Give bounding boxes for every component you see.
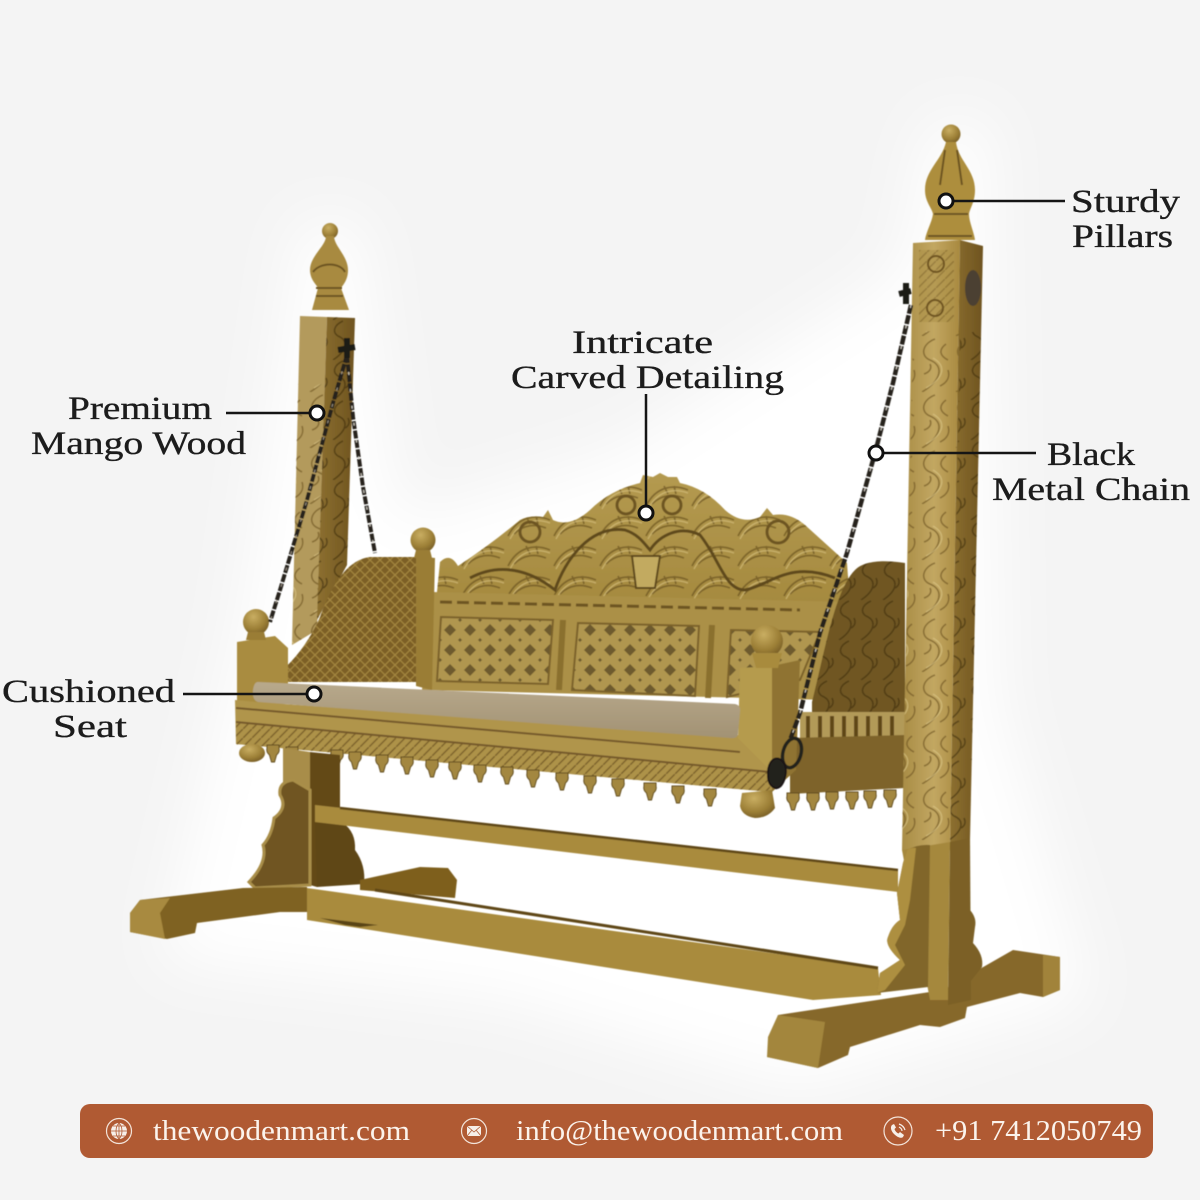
- back panel with lattice: [422, 592, 850, 700]
- chain lock: [768, 736, 805, 788]
- left pillar finial: [310, 223, 349, 310]
- right chain: [790, 305, 911, 740]
- lower rail: [307, 888, 881, 1000]
- callout: Intricate Carved Detailing: [511, 325, 784, 520]
- right front post: [738, 666, 772, 772]
- chains: [270, 283, 911, 788]
- back foot: [360, 867, 457, 898]
- left right bracket: [315, 823, 364, 887]
- right base: [767, 950, 1060, 1068]
- balusters: [800, 712, 905, 740]
- right rear bracket: [970, 910, 982, 982]
- email text: info@thewoodenmart.com: [516, 1115, 843, 1147]
- left seat side panel: [277, 557, 420, 682]
- left back post: [416, 556, 435, 690]
- ball finials: [243, 609, 269, 635]
- callout: Sturdy Pillars: Pillars: [1072, 219, 1173, 255]
- front foot beam: [130, 887, 307, 939]
- left bracket: [249, 780, 310, 888]
- callout: Cushioned Seat: Seat: [53, 709, 127, 745]
- right pillar finial: [925, 124, 975, 240]
- lattice panel right: [727, 630, 820, 697]
- website text: thewoodenmart.com: [153, 1115, 410, 1147]
- right pillar lower section: [902, 842, 950, 1000]
- right pillar side face: [950, 240, 983, 850]
- left base: [130, 867, 881, 1000]
- left rear post: [237, 636, 288, 745]
- contact bar: [80, 1104, 1153, 1158]
- right pillar: [877, 124, 983, 1005]
- left chain back: [347, 355, 375, 553]
- pillar bolt: [965, 270, 981, 306]
- callout: Black Metal Chain: [869, 437, 1190, 508]
- callout: Premium Mango Wood: Mango Wood: [31, 426, 247, 462]
- left chain front: [270, 355, 347, 622]
- icon: phone: [884, 1117, 912, 1145]
- icon: envelope: [462, 1118, 486, 1144]
- callout: Intricate Carved Detailing: Carved Detailing: [511, 360, 784, 396]
- callout: Sturdy Pillars: Sturdy: [1071, 184, 1181, 220]
- right seat side panel: [790, 561, 905, 794]
- callout: Intricate Carved Detailing: Intricate: [572, 325, 713, 361]
- left pillar side face: [317, 317, 355, 620]
- left pillar front face: [292, 316, 327, 645]
- right chain hook: [899, 283, 911, 304]
- callout: Sturdy Pillars: [939, 184, 1181, 255]
- background white glow: [160, 120, 1090, 1090]
- left chain hook: [338, 338, 355, 358]
- right front bracket: [877, 845, 930, 993]
- seat rail: [235, 700, 772, 792]
- callout: Black Metal Chain: Black: [1047, 437, 1136, 473]
- left lower post: [283, 748, 310, 885]
- left leg stand: [249, 748, 364, 888]
- callout: Premium Mango Wood: [31, 391, 324, 462]
- icon: globe: [106, 1118, 132, 1144]
- upper stretcher rail: [315, 805, 898, 892]
- callout: Cushioned Seat: [2, 674, 321, 745]
- callout: Black Metal Chain: Metal Chain: [992, 472, 1190, 508]
- seat frame: [235, 528, 800, 818]
- hanging spindles: [267, 745, 896, 810]
- callout: Premium Mango Wood: Premium: [68, 391, 212, 427]
- right pillar front face: [902, 240, 960, 850]
- left pillar: [292, 223, 355, 645]
- lattice panel centre: [572, 623, 699, 696]
- callout: Cushioned Seat: Cushioned: [2, 674, 176, 710]
- crest back carving: [437, 473, 850, 604]
- cushion: [253, 682, 740, 738]
- swing illustration: [130, 124, 1060, 1068]
- lattice panel left: [437, 617, 553, 684]
- phone text: +91 7412050749: [935, 1115, 1142, 1147]
